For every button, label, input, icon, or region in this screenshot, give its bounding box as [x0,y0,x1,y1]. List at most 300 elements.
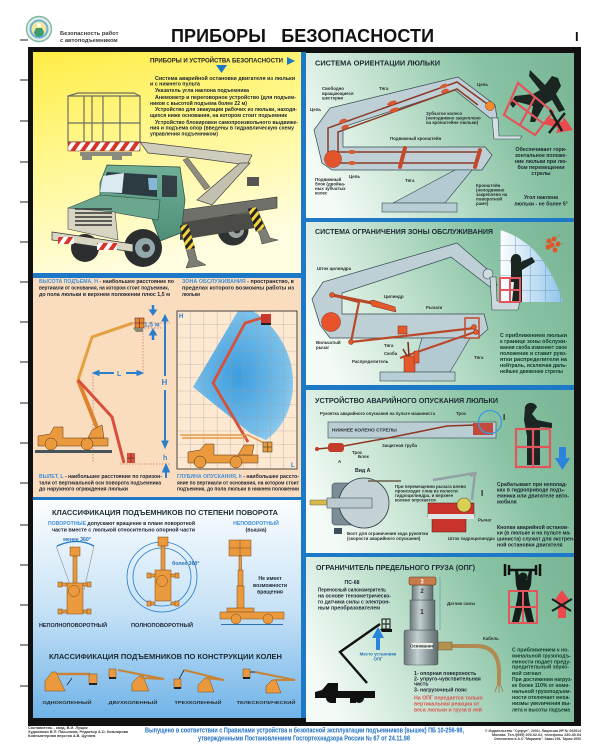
text: limiter function: ности отключает меха- [512,695,570,701]
note: вращения [257,590,283,596]
text: service zone [182,279,294,298]
icon: hazard cluster [545,235,563,252]
text: load sensor description: ным преобразователем [318,604,380,612]
text: function: Обеспечивает гори- [515,146,567,153]
diagram labels: Цепь [310,107,321,112]
worker silhouette [524,403,552,465]
text: load sensor description: ПС-68 [345,580,360,586]
sheet number: I [575,29,579,44]
devices list: ния и подъема опор (введены в гидравлическую схему [150,126,294,132]
icon: single-knee lift [42,672,97,706]
diagram: view A [310,468,401,534]
sensor base [404,630,438,665]
icon: tilted worker in basket [504,70,565,135]
text: function: бом перемещении [517,164,565,171]
panel: height and zone [33,278,301,497]
panel: load limiter [306,557,574,722]
diagram labels [320,411,467,464]
devices list: управления подъемником) [150,132,218,138]
text: emergency button: Кнопки аварийной останов- [497,524,569,531]
text: function: к границе зоны обслужи- [500,338,567,345]
movable bracket [400,148,480,167]
text: trigger: Срабатывает при неполад- [497,481,567,488]
diagram labels: поворотной [476,196,502,202]
text: service zone: ЗОНА ОБСЛУЖИВАНИЯ - пространство, в [182,279,294,285]
devices list: ников с высотой подъема более 22 м) [150,100,247,107]
footer: publisher: Москва. Тел./(095) 209-02-02, телефоны 230-49-94 [492,733,582,737]
icon: triple-knee lift [174,670,224,706]
valve block [428,503,474,532]
panel background [33,52,301,273]
header subject text: с автоподъемником [60,38,118,44]
warning text: На ОПГ передается только [414,696,483,702]
diagram labels [316,266,484,364]
diagram: full rotation [127,537,199,629]
label: ПОЛНОПОВОРОТНЫЙ [131,621,193,629]
text: lowering depth [177,473,299,492]
text: limiter function: лета и высоты подъема [512,708,571,714]
raised boom [213,317,265,442]
machine top view [147,537,179,606]
top basket [133,318,144,332]
text: function [515,146,567,177]
devices list: и с нижнего пульта [150,82,200,88]
cradle bracket [492,118,522,139]
valve core [428,514,474,519]
footer: regulation note: Выпущено в соответствии с Правилами устройства и безопасной эксплуатации подъемников (вышек) ПБ 10-256-98, [145,726,464,734]
pivot [483,269,493,279]
note [253,576,287,596]
cylinder rod [332,295,372,303]
heading: СИСТЕМА ОГРАНИЧЕНИЯ ЗОНЫ ОБСЛУЖИВАНИЯ [315,227,493,236]
text: limiter function: вой сигнал [512,670,541,677]
panel background [306,222,574,385]
loading ring [409,577,436,585]
devices list: Устройство для эвакуации рабочих из люльки, находя- [155,106,297,113]
diagram labels: Подвижный [315,177,341,182]
connector [438,642,452,650]
disc [339,478,389,528]
dimension labels: h [163,455,167,462]
base [412,338,470,372]
barbell [505,564,540,576]
diagram labels: раме) [476,201,489,206]
text: limiter function: ке более 110% от номи- [512,682,570,689]
view labels: происходит слив из полости [395,488,458,494]
text: sensor parts: 2- упруго-чувствительная [414,676,481,682]
devices list: Указатель угла наклона подъемника [155,88,249,94]
text: limiter function: минальной грузоподъ- [512,652,571,660]
text: rotary definition [48,520,195,534]
diagram labels: Трос [352,450,363,455]
diagram labels: Блок [358,454,370,459]
angle label: менее 360° [63,537,91,543]
figure [512,571,534,622]
text: sensor parts: часть [414,682,429,688]
boom support arms [197,163,250,205]
beam label: НИЖНЕЕ КОЛЕНО СТРЕЛЫ [332,428,397,434]
icon: crossed up arrow [552,590,572,618]
text: function: зонтальное положе- [515,153,567,159]
dimension labels: H [162,378,168,387]
note: Не имеет [258,576,282,582]
red basket [504,83,553,135]
boom beam [328,422,496,438]
diagram labels: Зубчатое колесо [426,111,462,116]
distributor [403,342,419,372]
chart background [177,311,297,469]
label: НЕПОЛНОПОВОРОТНЫЙ [39,621,107,629]
view labels: Рычаг [478,518,492,522]
panel background [33,500,301,718]
top mechanism [473,423,493,435]
icon: single-knee lift: ОДНОКОЛЕННЫЙ [42,698,92,706]
diagram labels: Тяга [474,355,484,360]
text: load sensor description [318,580,391,612]
lever details [330,292,479,344]
rotation arc [57,542,94,546]
lowered basket [263,442,272,452]
grille [68,208,118,240]
text: lifting height: до пола люльки в верхнем положении плюс 1,5 м [39,292,170,298]
basket hazard strip [68,142,140,151]
diagram: height and reach [35,305,170,478]
ground [35,450,112,453]
window grid [500,230,563,302]
text: tilt limit [514,195,568,208]
roman marker: I [503,413,505,422]
panel background [306,390,574,553]
cradle bracket [490,277,520,310]
base band label: Основание [410,644,435,648]
boom outline [312,243,497,338]
boom outline [314,77,497,170]
text: reach: тали от вертикальной оси поворота подъемника [39,480,161,486]
diagram: service zone chart [177,311,297,469]
numbers: 3 [420,580,424,586]
text: tilt limit: люльки - не более 5° [514,200,568,208]
text: trigger: емника или двигателе авто- [497,494,569,500]
diagram labels: вращающиеся [322,91,354,96]
machine top view [58,547,91,614]
worker silhouette [510,70,565,122]
chart axis labels [179,314,295,469]
heading: СИСТЕМА ОРИЕНТАЦИИ ЛЮЛЬКИ [315,58,440,68]
bottom basket [127,453,135,463]
text: function: ние люльки при лю- [515,159,567,165]
red grid [509,591,537,623]
lowered boom [180,435,268,445]
icon: crossed arrow [544,110,573,133]
big sprocket [324,150,342,168]
diagram: black lift silhouette [315,619,397,703]
arrows and dimension marks [93,305,170,478]
red basket [516,429,550,467]
heading: ОГРАНИЧИТЕЛЬ ПРЕДЕЛЬНОГО ГРУЗА (ОПГ) [316,563,475,572]
service zone shape [193,311,293,440]
chain tie links [339,83,449,165]
diagram labels: Кронштейн [476,183,501,188]
text: trigger: ках в гидроприводе подъ- [497,488,565,494]
dotted guide lines [93,323,170,464]
diagram labels: Распределитель [352,359,389,364]
text: non-rotary definition: (вышка) [246,528,267,534]
panel: emergency lowering [306,390,575,553]
view labels: Шток гидроцилиндра [448,536,495,541]
header subject text: Безопасность работ [60,30,119,37]
sensor labels: Датчик силы [447,601,475,606]
view labels: При перемещении рычага влево [395,484,466,489]
icon: double-knee lift: ДВУХКОЛЕННЫЙ [108,698,158,706]
machine side view [220,540,284,624]
diagram labels: Скоба [384,351,398,356]
heading: rotation classification: КЛАССИФИКАЦИЯ ПОДЪЕМНИКОВ ПО СТЕПЕНИ ПОВОРОТА [52,510,278,517]
bolt [334,528,342,534]
text: limiter function: предительный звуко- [512,664,569,670]
devices list: Система аварийной остановки двигателя из люльки [155,75,295,82]
numbers [420,580,424,616]
lower boom [78,380,100,435]
icon: logo [26,16,52,42]
diagram labels: Вильчатый [316,340,341,345]
text: lifting height: ВЫСОТА ПОДЪЕМА, Н - наибольшее расстояние по [39,278,174,285]
devices list [150,75,298,138]
bumper [52,232,133,252]
text: limiter function: С приближением к но- [512,646,569,654]
red basket [500,278,520,302]
text: function: положение и ставит руко- [500,351,567,357]
sensor upper [412,585,433,600]
basket support [80,152,132,160]
warning text [414,696,483,714]
panel: service zone limiter [306,222,574,385]
chart axis labels: L [291,463,295,469]
panel: classification [33,500,301,718]
mounting label: ОПГ [373,656,383,662]
footer: publisher: Отпечатано в А.О "Марииев". Заказ 294. Тираж 2000 [494,737,581,741]
text: service zone: люльки [182,292,200,298]
lever [433,473,477,500]
rear wheel [218,214,248,246]
diagram labels: Подвижный кронштейн [390,136,442,141]
diagram labels: шестерни [322,96,343,100]
panel: platform orientation system [306,53,574,218]
mounting label: Место установки [360,652,397,656]
outrigger left [180,224,206,268]
diagram labels: Цепь [477,82,488,87]
text: function: нейшее движение стрелы [500,368,563,375]
small sprocket [486,102,494,110]
text: non-rotary definition [233,519,279,534]
text: emergency button: шиниста) служат для экстрен- [497,536,575,542]
diagram labels: колес [315,190,328,196]
limit lines [56,546,94,590]
handle [315,443,344,452]
footer: authors: Составитель - канд. В.И. Лущик [28,726,88,730]
text: load sensor description: Переносный силоизмеритель [318,586,386,594]
diagram labels: закреплено на [476,192,508,197]
footer: authors [28,726,129,738]
panel background [306,557,574,722]
panel heading: ПРИБОРЫ И УСТРОЙСТВА БЕЗОПАСНОСТИ [150,56,283,64]
sensor middle [410,600,435,630]
roman marker: I [481,489,483,498]
note: возможности [253,583,287,589]
text: lifting height [39,278,174,298]
sensor labels [447,601,499,641]
chains [328,82,490,163]
warning text: вертикальная реакция от [414,702,480,708]
numbers: 2 [420,589,424,595]
truck [188,444,258,468]
icon: window with worker [500,230,563,302]
panel: safety devices with truck [33,52,301,273]
text: non-rotary definition: НЕПОВОРОТНЫЙ [233,519,279,527]
diagram: boom with chains [314,77,522,212]
text: emergency button: ки (в люльке и на пульте ма- [497,530,571,536]
angle label: более 360° [172,560,199,567]
mounting label [360,652,397,662]
text: limiter function: емности подает преду- [512,660,571,666]
view labels: гидроцилиндра, и верхнее [395,493,454,498]
raised basket [261,314,271,325]
diagram labels: Цепь [349,174,360,179]
devices list: Устройство блокировки самопроизвольного выдвиже- [155,119,298,126]
panel background [306,53,574,218]
view labels: Болт для ограничения хода рукоятки [347,531,428,536]
heading: boom classification: КЛАССИФИКАЦИЯ ПОДЪЕМНИКОВ ПО КОНСТРУКЦИИ КОЛЕН [49,654,282,661]
numbers: 1 [420,609,424,616]
text: reach: до наружного ограждения люльки [39,486,128,492]
panel background [33,278,301,497]
diagram labels: (неподвижно закреплено [426,116,481,120]
protective tube [317,425,475,449]
basket [382,619,390,629]
text: function: С приближением люльки [500,332,568,339]
dimension labels: 1,5 м [144,322,160,328]
text: lowering depth: яние по вертикали от основания, на котором стоит [177,480,299,486]
cylinder [370,300,396,312]
blue arrow [372,627,384,650]
chart grid [177,311,297,469]
cable ends [495,686,503,693]
diagram labels: Шток цилиндра [317,266,352,271]
text: limiter function: низмы увеличения вы- [512,701,571,707]
control box [247,177,259,186]
ground [221,624,283,625]
diagram labels: Свободно [322,86,344,91]
diagram labels: на кронштейне люльки) [426,120,479,125]
icon: telescopic lift [236,669,296,706]
footer: regulation note [145,726,464,742]
text: sensor parts: 1- опорная поверхность [414,671,476,677]
text: limiter function: нальной грузоподъем- [512,688,571,695]
diagram: non-rotary lift [220,540,287,625]
basket cage [68,93,140,142]
upper boom [78,323,133,380]
header [26,16,579,46]
big wheel [322,312,340,332]
warning text: веса люльки и груза в ней [414,706,482,714]
text: rotary definition: ПОВОРОТНЫЕ допускают вращение в плане поворотной [48,520,195,527]
diagram labels: ных зубчатых [315,186,346,191]
text: function: нейтраль, исключая даль- [500,362,567,369]
diagram labels: Защитная труба [382,443,418,448]
boom [140,142,252,165]
view labels: (скорости аварийного опускания) [347,536,421,541]
truck illustration [52,93,278,268]
text: sensor parts [414,671,481,694]
dimension labels [117,322,168,462]
text: rotary definition: части вместе с люлькой относительно опорной части [52,526,195,534]
diagram: lower boom and cable [315,410,505,452]
gear [457,498,471,512]
text: reach: ВЫЛЕТ, L - наибольшее расстояние по горизон- [39,473,162,480]
diagram labels: Трос [456,411,467,416]
text: limiter function [512,646,572,714]
diagram labels [310,82,508,206]
truck [315,683,375,703]
front wheels [71,229,162,267]
diagram labels: Тяга [384,343,394,348]
blue arrow [555,447,570,470]
text: load sensor description: на основе тензометрическо- [318,594,391,600]
registration ticks on left edge [20,40,28,686]
diagram: force sensor [404,577,503,693]
icon: blue right triangle [287,57,295,65]
sensor labels: Кабель [483,636,499,641]
text: trigger: мобиля [497,498,517,506]
icon: worker in basket with down arrow [516,403,570,470]
circle highlight [478,410,502,434]
diagram: detail I hydraulic valve [428,473,483,532]
text: function [500,332,568,375]
view labels: колено опускается [395,498,436,502]
bell crank and rods [332,295,475,358]
diagram labels: (неподвижно [476,188,505,192]
title: ПРИБОРЫ БЕЗОПАСНОСТИ [171,26,434,46]
text: function: стрелы [531,171,551,177]
text: service zone: пределах которого возможны работы из [182,284,294,292]
worker silhouette [511,254,535,302]
footer: authors: Компьютерная верстка А.В. Цуняев [28,734,96,738]
cab [100,165,185,241]
rotation circles [127,542,197,612]
icon: triple-knee lift: ТРЕХКОЛЕННЫЙ [174,698,222,706]
devices list: щихся ниже основания, на котором стоит подъемник [150,113,287,119]
diagram: boom and cylinder [312,243,520,381]
icon: telescopic lift: ТЕЛЕСКОПИЧЕСКИЙ [236,698,296,706]
boom [340,624,380,683]
text: emergency button: ной остановки двигателя [497,542,563,548]
header subject text [60,30,119,44]
truck [38,425,108,450]
text: reach [39,473,162,492]
devices list: Анемометр и переговорное устройство (для подъем- [155,94,296,101]
diagram labels: Тяга [379,86,389,91]
footer: regulation note: утвержденными Постановлением Госгортехнадзора России № 67 от 24.11.98 [198,734,410,742]
cab windows [100,172,157,197]
text: function: ятки распределителя на [500,357,568,363]
diagram labels: Рукоятка аварийного опускания на пульте машиниста [320,411,436,416]
icon: double-knee lift [108,669,164,706]
cable [438,646,499,686]
text: lowering depth: подъемник, до пола люльки в нижнем положении [177,486,299,492]
footer: publisher: © Издательство "Супрун", 2001г. Лицензия ИР № 062014 [485,729,582,733]
hood [68,195,160,220]
diagram labels: блок (двойна- [315,182,346,186]
footer: authors: Художники В.П. Пасынков, Редактор А.О. Комлирова [28,730,129,734]
